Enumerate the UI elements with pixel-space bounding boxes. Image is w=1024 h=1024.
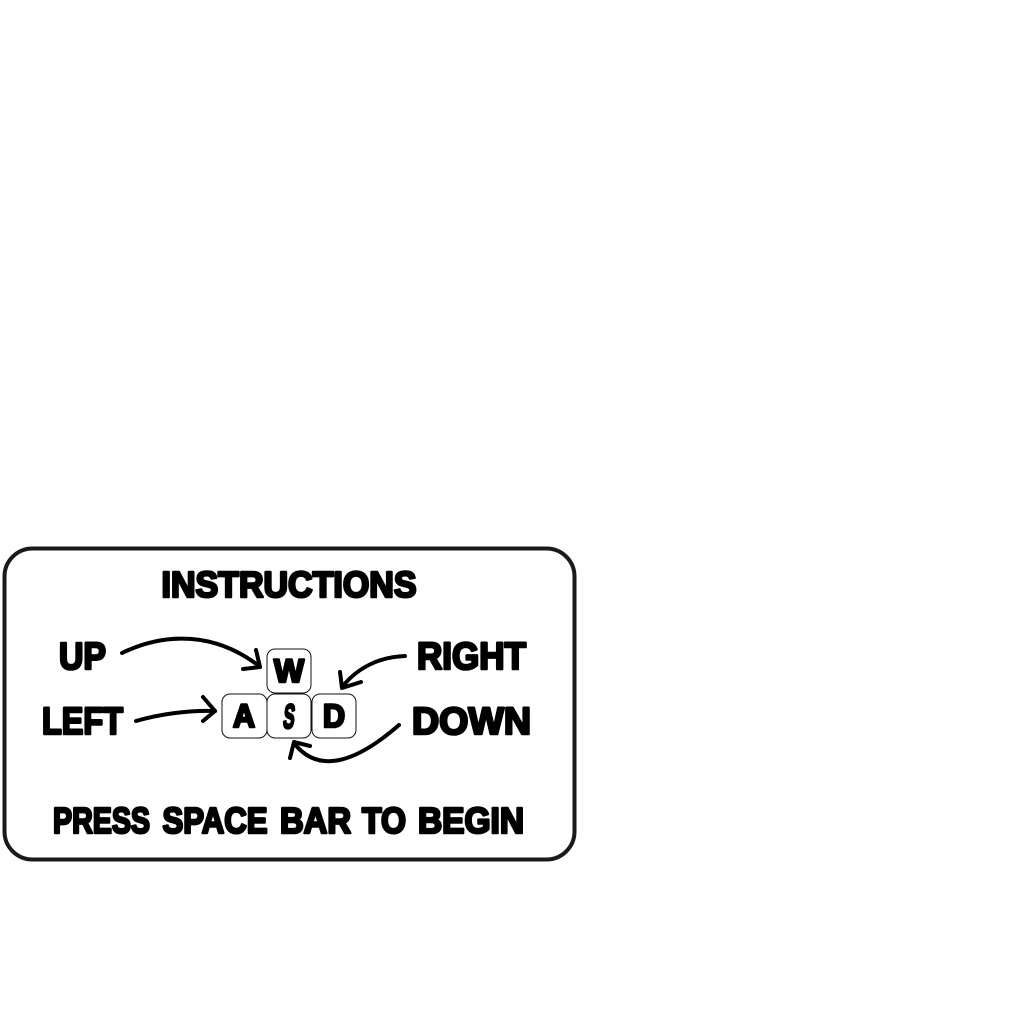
call to action: press space bar to begin: PRESS (53, 800, 150, 841)
heading: instructions: INSTRUCTIONS (162, 564, 416, 605)
label: right: RIGHT (417, 636, 526, 678)
instructions panel (4, 548, 574, 860)
arrow: down to S (290, 725, 399, 761)
label: left: LEFT (42, 701, 123, 743)
call to action: press space bar to begin: BEGIN (418, 800, 524, 841)
key: D: D (323, 698, 345, 734)
key: A: A (233, 698, 255, 734)
key: W: W (274, 653, 305, 689)
key: S: S (282, 698, 297, 736)
call to action: press space bar to begin: BAR (280, 800, 351, 841)
label: up: UP (59, 636, 106, 678)
call to action: press space bar to begin (53, 800, 524, 841)
arrow: left to A (136, 697, 215, 721)
call to action: press space bar to begin: TO (362, 800, 406, 841)
arrow: right to D (340, 656, 405, 688)
label: down: DOWN (412, 701, 531, 743)
key: S (267, 694, 311, 738)
call to action: press space bar to begin: SPACE (162, 800, 268, 841)
key: A (222, 694, 267, 738)
arrow: up to W (122, 639, 260, 669)
key: W (267, 649, 311, 693)
key: D (312, 694, 356, 738)
